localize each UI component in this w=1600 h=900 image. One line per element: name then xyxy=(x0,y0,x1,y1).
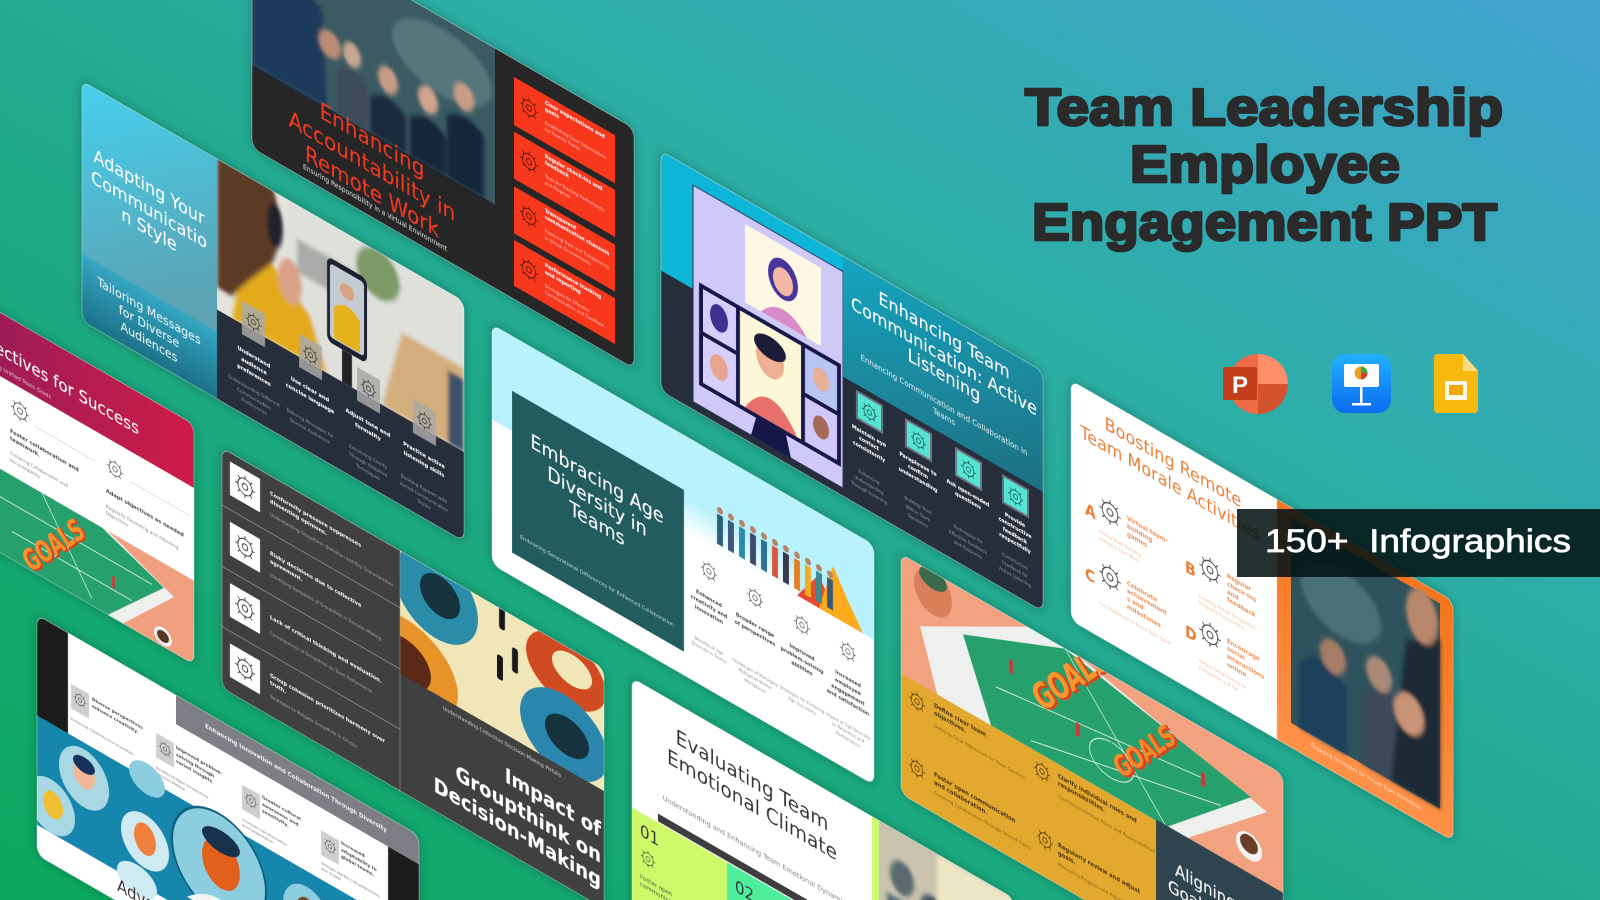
listening tips: Within Team xyxy=(906,504,931,524)
gold panel: Foster open communication xyxy=(934,772,1015,825)
activities grid: Online Team Building xyxy=(1099,529,1141,559)
dark info strip: listening skills xyxy=(404,450,445,480)
card list: Performance tracking xyxy=(545,263,601,301)
activities grid: feedback xyxy=(1227,596,1256,620)
benefits row: Greater cultural xyxy=(262,794,301,823)
activities grid: s and xyxy=(1127,595,1144,612)
card list: Fostering Trust and Transparency xyxy=(545,228,610,271)
title: Remote Work xyxy=(305,141,440,244)
subtitle: Ensuring Responsibility in a Virtual Environment xyxy=(303,163,447,254)
listening tips: Constructive xyxy=(1002,552,1028,572)
title: Groupthink on xyxy=(456,761,601,868)
listening tips: Provide xyxy=(1005,512,1025,530)
photo: goals pitch: GOALS xyxy=(1025,638,1116,720)
photo: woman filming with phone xyxy=(217,153,464,452)
card list: Tools for Tracking Performance xyxy=(544,173,605,214)
benefits row: Decision-Making xyxy=(156,770,185,792)
listening tips: questions xyxy=(955,491,981,512)
left panel: n Style xyxy=(121,204,177,257)
listening tips: constructive xyxy=(999,516,1032,541)
left panel: Communicatio xyxy=(91,166,207,254)
gold panel: goals. xyxy=(1058,850,1076,867)
benefits list: Enhanced xyxy=(696,589,722,610)
header band xyxy=(0,312,194,488)
card list: for Remote Teams xyxy=(545,127,581,153)
benefits row: enhance creativity. xyxy=(92,703,138,736)
main title: Team Leadership xyxy=(1025,79,1503,137)
activities grid: milestones xyxy=(1127,603,1161,630)
causes list: truth. xyxy=(270,680,286,696)
gold panel: Clarify individual roles and xyxy=(1058,773,1137,825)
card list: goals xyxy=(545,107,559,121)
slide: Aligning Team Goals xyxy=(901,526,1283,900)
activities grid: games xyxy=(1127,531,1148,549)
dark info strip: Practice active xyxy=(403,441,445,471)
right header: Enhancing Communication and Collaboration in xyxy=(861,353,1027,458)
causes list: agreement. xyxy=(270,559,303,583)
benefits list: Increased xyxy=(835,669,861,690)
benefits list: on Retention and xyxy=(832,721,864,746)
dark info strip: Enhancing Clarity xyxy=(349,443,387,471)
objectives: Foster collaboration and xyxy=(10,428,79,474)
activities grid: D xyxy=(1185,621,1197,647)
header band: Enhancing Innovation and Collaboration Through Diversity xyxy=(205,723,387,834)
listening tips: and Response xyxy=(954,539,982,561)
benefits list: Broader range xyxy=(736,612,774,640)
photo: goals pitch: GOALS xyxy=(16,512,91,579)
main title: Engagement PPT xyxy=(1032,194,1497,252)
card list: communication channels xyxy=(545,215,609,258)
card list: Communication and Feedback xyxy=(545,290,604,330)
title: Evaluating Team xyxy=(676,725,828,836)
card list: in Virtual Environments xyxy=(545,235,591,267)
title: Decision-Making xyxy=(434,772,601,893)
activities grid: Fun Challenges to Boost Team Spirit xyxy=(1099,600,1171,648)
activities grid: Regular xyxy=(1227,573,1252,594)
title: Team Morale Activities xyxy=(1079,421,1260,546)
card list: Transparent xyxy=(545,208,577,232)
activities grid: check-ins xyxy=(1227,581,1256,604)
benefits list: Challenges of Managing xyxy=(732,657,778,689)
causes list: Group cohesion prioritizes harmony over xyxy=(270,673,385,745)
benefits row xyxy=(71,684,380,900)
dark info strip: Varied Communication xyxy=(400,480,448,514)
causes list: Identifying Symptoms of Groupthink in Decision-Making xyxy=(270,572,381,642)
benefits row: Improved Communication xyxy=(242,816,288,848)
card list: and reporting xyxy=(545,270,581,296)
dark info strip: Understand xyxy=(238,345,270,370)
benefits row: and Growth xyxy=(321,865,342,882)
photo: goals pitch xyxy=(914,534,1267,897)
causes list xyxy=(222,457,400,775)
benefits row: solving through xyxy=(176,752,215,780)
photo: abstract rings and walkers xyxy=(222,452,604,792)
dark title panel xyxy=(1156,819,1283,900)
benefits list: Improved xyxy=(789,643,815,663)
listening tips: Enhancing xyxy=(859,469,880,487)
listening tips: understanding xyxy=(899,466,938,494)
right header: Listening xyxy=(908,345,980,407)
activities grid: Connection and Fun xyxy=(1199,665,1239,694)
icon: Google Slides xyxy=(1434,354,1478,413)
photo: man pointing xyxy=(1291,514,1440,809)
benefits list: of perspectives xyxy=(735,619,775,648)
card list: feedback xyxy=(545,160,569,180)
right header: Communication: Active xyxy=(851,293,1037,421)
causes list: Understanding Groupthink: Definition and Key Characteristics xyxy=(270,512,394,589)
card list xyxy=(514,77,615,344)
step cards: Foster open xyxy=(640,873,672,899)
objectives: Regularly Reviewing and Adjusting xyxy=(106,504,178,551)
causes list: Consequences of Groupthink on Team Performance xyxy=(270,630,372,695)
right header: Enhancing Team xyxy=(878,288,1010,384)
activities grid: Celebrate xyxy=(1127,580,1157,604)
activities grid: C xyxy=(1085,564,1095,588)
benefits list: Multigenerational xyxy=(738,667,772,692)
benefits list: creativity and xyxy=(691,594,728,621)
right header: Teams xyxy=(932,405,955,428)
title: Emotional Climate xyxy=(667,744,837,866)
dark info strip: preferences xyxy=(237,363,271,389)
dark info strip xyxy=(217,286,464,541)
title: Enhancing xyxy=(320,98,424,184)
dark info strip: Adjust tone and xyxy=(346,408,390,439)
card list: Establishing Clear Expectations xyxy=(545,120,607,162)
dark info strip: Techniques xyxy=(355,462,380,483)
activities grid: B xyxy=(1185,557,1196,581)
left panel xyxy=(82,81,217,399)
banner: 150+ Infographics xyxy=(1237,509,1600,577)
gold panel xyxy=(901,673,1156,900)
card list: Clear expectations and xyxy=(545,100,605,140)
objectives: Accountability xyxy=(10,457,40,480)
gold panel: Regularly review and adjust xyxy=(1058,843,1140,896)
activities grid: Activities That Work xyxy=(1099,536,1139,565)
causes list: Risky decisions due to collective xyxy=(270,551,361,610)
benefits row: Enhanced Creativity and Innovation xyxy=(71,716,134,757)
card list: Regular check-ins and xyxy=(545,153,603,193)
people row and peaks xyxy=(717,499,863,633)
benefits row: varied insights. xyxy=(176,758,214,786)
benefits row: adaptability to xyxy=(341,847,377,874)
left panel: Adapting Your xyxy=(94,146,205,231)
benefits list: Diversity in Teams xyxy=(692,640,727,666)
gold panel: Defining Clear Objectives for Team Success xyxy=(934,723,1025,782)
slide: Advancing Team Diversity xyxy=(27,609,419,900)
header band xyxy=(176,695,419,864)
dark info strip: Styles xyxy=(417,498,431,512)
slide: Impact of Groupthink on Decision-Making xyxy=(222,430,608,900)
benefits list: employee xyxy=(835,677,861,698)
slide: Enhancing Team Communication: Active Listening xyxy=(661,151,1043,611)
objectives: Objectives xyxy=(106,510,128,529)
listening tips: Techniques for xyxy=(953,523,983,546)
activities grid: Encourage xyxy=(1227,637,1260,663)
benefits row: Stronger Market Competitiveness xyxy=(321,860,380,898)
activities grid: A xyxy=(1085,499,1096,524)
dark info strip: Building Rapport with xyxy=(401,473,447,506)
dark info strip: audience xyxy=(241,356,267,377)
icon: Keynote xyxy=(1332,354,1391,413)
card list: and Progress xyxy=(545,180,571,201)
benefits row: and Collaboration xyxy=(242,822,273,845)
activities grid: social xyxy=(1227,645,1245,662)
banner: 150+ Infographics: 150+ Infographics xyxy=(1265,523,1571,559)
listening tips xyxy=(850,387,1032,590)
title panel: Embracing Generational Differences for Enhanced Collaboration xyxy=(520,534,674,629)
dark info strip: Tailoring Messages for xyxy=(285,406,334,440)
activities grid: interactions xyxy=(1227,653,1265,682)
activities grid: Virtual Social Events for xyxy=(1199,658,1247,691)
activities grid: Programs Successfully xyxy=(1199,600,1244,632)
left panel: Tailoring Messages xyxy=(96,273,201,348)
gold panel: Fostering Collaboration Through Shared Goals xyxy=(934,790,1031,852)
listening tips: Through Listening xyxy=(850,479,887,507)
left panel: for Diverse xyxy=(119,301,179,351)
slide: Adapting Your Communication Style xyxy=(82,75,464,541)
photo: goals pitch: GOALS xyxy=(1109,719,1184,786)
causes list: Conformity pressure suppresses xyxy=(270,491,362,550)
benefits list: and satisfaction xyxy=(827,688,869,718)
listening tips: Dynamics xyxy=(908,513,928,530)
causes list: Strategies to Mitigate Groupthink in Groups xyxy=(270,694,358,750)
objectives xyxy=(10,400,190,550)
gold panel: Clarifying Individual Roles and Responsibilities xyxy=(1058,794,1155,856)
dark info strip: Diverse Audiences xyxy=(290,417,330,446)
benefits list: problem-solving xyxy=(781,646,824,676)
dark bar xyxy=(658,814,808,900)
photo: goals pitch xyxy=(0,468,194,662)
photo: business team xyxy=(252,0,495,204)
step cards: 01 xyxy=(640,821,659,851)
dark info strip: concise language xyxy=(286,382,334,416)
photo: goals pitch: GOALS xyxy=(1107,718,1182,785)
listening tips: Feedback for xyxy=(1002,559,1028,580)
photo caption: Engaging Strategies for Virtual Team Motivation xyxy=(1311,743,1421,812)
dark info strip: Through Adaptive xyxy=(348,450,387,479)
icon: PowerPoint xyxy=(1223,354,1288,414)
listening tips: respectfully xyxy=(999,532,1031,556)
title: Impact of xyxy=(505,763,602,843)
dark info strip: formality xyxy=(355,422,381,443)
listening tips: Active Listening xyxy=(999,565,1031,590)
right header xyxy=(843,256,1043,492)
illustration: diverse faces xyxy=(37,716,358,900)
benefits list: Performance xyxy=(836,730,860,750)
slide: Objectives for Success xyxy=(0,308,199,666)
title panel xyxy=(512,391,684,652)
listening tips: Effective Feedback xyxy=(949,529,987,557)
slide: Evaluating Team Emotional Climate xyxy=(632,678,1014,900)
illustration: video call xyxy=(693,185,843,488)
gold panel: objectives. xyxy=(934,711,966,735)
photo: goals pitch: GOALS xyxy=(18,513,92,579)
photo: goals pitch: GOALS xyxy=(1027,640,1118,721)
benefits list xyxy=(691,552,871,756)
listening tips: consistently xyxy=(853,440,886,464)
gold panel: and collaboration. xyxy=(934,780,987,817)
benefits list: Benefits of Age xyxy=(695,635,724,658)
benefits list: abilities xyxy=(791,660,813,678)
gold panel: responsibilities. xyxy=(1058,781,1105,814)
activities grid: achievement xyxy=(1127,588,1167,617)
causes list: Lack of critical thinking and evaluation. xyxy=(270,615,382,685)
title: Boosting Remote xyxy=(1105,413,1241,513)
listening tips: confirm xyxy=(908,464,928,481)
benefits list: Workplaces xyxy=(744,677,767,696)
title panel: Diversity in xyxy=(547,461,647,541)
listening tips: contact xyxy=(859,435,879,453)
benefits list: Strategies for Fostering xyxy=(780,684,824,716)
card list: Strategies for Effective xyxy=(545,283,590,315)
objectives: teamwork. xyxy=(10,436,40,459)
benefits row: awareness and xyxy=(262,801,299,828)
causes list: dissenting opinions. xyxy=(270,499,327,537)
listening tips: Maintain eye xyxy=(852,423,886,449)
step cards xyxy=(632,807,872,900)
photo: team meeting xyxy=(872,816,1014,900)
main title: Employee xyxy=(1130,136,1400,194)
activities grid: and xyxy=(1227,588,1239,602)
left panel: Audiences xyxy=(121,318,177,366)
listening tips: Paraphrase to xyxy=(899,451,937,478)
title panel: Teams xyxy=(568,496,625,551)
activities grid xyxy=(1084,498,1264,692)
benefits row: Improved problem- xyxy=(176,745,222,777)
gold panel: Define clear team xyxy=(934,703,986,739)
activities grid: Virtual team- xyxy=(1127,515,1168,546)
title panel: Embracing Age xyxy=(530,429,664,529)
listening tips: Ask open-ended xyxy=(947,478,989,509)
benefits row: global teams. xyxy=(341,853,374,878)
benefits row: sensitivity. xyxy=(262,808,289,829)
dark info strip: Preferences xyxy=(241,397,267,417)
title: Accountability in xyxy=(289,106,455,228)
benefits row: Diverse perspectives xyxy=(92,696,143,732)
listening tips: Understanding xyxy=(854,474,884,497)
benefits list: Impact of Age Diversity xyxy=(826,711,871,742)
activities grid: building xyxy=(1127,523,1152,544)
dark info strip: Use clear and xyxy=(291,376,329,404)
subtitle: Understanding Collective Decision-Making Pitfalls xyxy=(443,705,561,780)
slide: Enhancing Accountability in Remote Work xyxy=(252,0,634,368)
benefits row: Benefits Multiple Perspectives xyxy=(156,765,208,800)
dark info strip: Communication xyxy=(237,386,271,412)
dark info strip: Understanding Different xyxy=(228,373,280,409)
objectives: Fostering Collaboration and xyxy=(10,450,68,490)
benefits list: engagement xyxy=(831,683,865,708)
listening tips: Building Trust xyxy=(904,495,932,517)
listening tips: feedback xyxy=(1003,526,1027,546)
benefits list: innovation xyxy=(695,604,723,626)
activities grid: online xyxy=(1227,661,1246,679)
benefits row: Increased xyxy=(341,840,365,860)
slide: Boosting Remote Team Morale Activities xyxy=(1071,380,1453,841)
benefits list: Age Inclusivity xyxy=(788,696,816,718)
activities grid: Creating Virtual Recognition xyxy=(1199,593,1255,632)
slide: Embracing Age Diversity in Teams xyxy=(492,324,874,785)
icon: PowerPoint: P xyxy=(1232,372,1248,399)
objectives: Adapt objectives as needed xyxy=(106,488,184,539)
main title xyxy=(1025,79,1503,252)
